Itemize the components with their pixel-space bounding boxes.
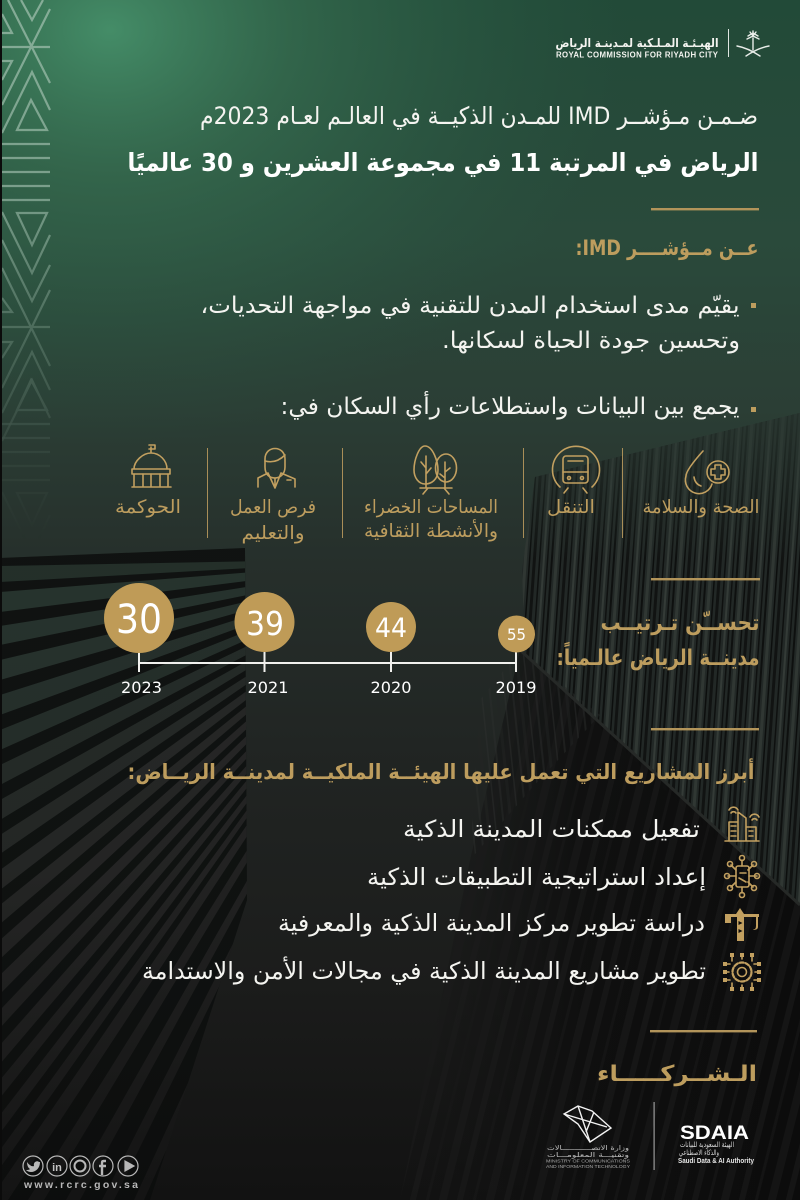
text block: index description: يقيّم مدى استخدام المدن للتقنية في مواجهة التحديات،	[200, 293, 740, 319]
project: security and sustainability	[142, 953, 761, 991]
text block: index description: يجمع بين البيانات واستطلاعات رأي السكان في:	[280, 391, 740, 420]
point: 2023 rank 30	[104, 583, 174, 697]
logo: ministry of communications: AND INFORMATION TECHNOLOGY	[546, 1164, 630, 1169]
title: الرياض في المرتبة 11 في مجموعة العشرين و 30 عالميًا	[127, 148, 758, 178]
domain: green spaces and culture	[364, 446, 498, 542]
timeline chart	[104, 583, 536, 697]
point: 2019 rank 55: 2019	[496, 678, 536, 697]
logo wordmark: الهيـئـة المـلـكية لمـدينـة الرياض	[556, 36, 718, 50]
domain: jobs and education: والتعليم	[242, 523, 304, 544]
domain: health and safety: الصحة والسلامة	[642, 497, 760, 518]
point: 2021 rank 39	[234, 592, 294, 697]
icon: domed building	[132, 445, 171, 487]
heading: partners: الـشــركـــــاء	[597, 1062, 757, 1087]
icon: two trees	[414, 446, 456, 494]
icon: palm and swords emblem	[737, 31, 769, 56]
point: 2020 rank 44	[366, 602, 416, 697]
point: 2019 rank 55: 55	[507, 625, 526, 644]
domain: mobility	[547, 446, 599, 518]
icon dots: circuit terminals	[723, 953, 761, 991]
logo wordmark	[556, 36, 719, 60]
domain: health and safety	[642, 451, 760, 518]
left ornament pattern	[2, 0, 51, 466]
icon: gear with circuits	[727, 957, 757, 987]
domain: jobs and education	[230, 448, 316, 544]
logo: SDAIA	[678, 1123, 754, 1165]
domain: mobility: التنقل	[547, 497, 595, 518]
social media and website	[23, 1156, 138, 1191]
domain: governance: الحوكمة	[115, 497, 181, 518]
domain dividers	[208, 448, 622, 538]
title: ضـمـن مـؤشــر IMD للمـدن الذكيــة في العالـم لعـام 2023م	[200, 102, 758, 130]
project: smart apps strategy: إعداد استراتيجية التطبيقات الذكية	[367, 863, 706, 892]
project: smart city centre development: دراسة تطوير مركز المدينة الذكية والمعرفية	[278, 909, 705, 937]
social media and website: www.rcrc.gov.sa	[23, 1179, 138, 1191]
logo: ministry of communications: وزارة الاتصــــــــــــالات	[547, 1144, 629, 1152]
left edge strip	[0, 0, 2, 1200]
icon: tower crane	[725, 908, 759, 941]
logo: SDAIA: والذكاء الاصطناعي	[679, 1148, 719, 1157]
heading: Riyadh ranking improvement: مدينــة الرياض عالـمياً:	[556, 641, 760, 671]
point: 2023 rank 30: 2023	[121, 678, 162, 697]
point: 2021 rank 39: 39	[246, 604, 284, 643]
panel: index domains	[115, 445, 760, 544]
text block: index description: وتحسين جودة الحياة لسكانها.	[442, 328, 740, 354]
icon: business person	[258, 448, 295, 488]
heading: key projects: أبرز المشاريع التي تعمل عليها الهيئــة الملكيــة لمدينــة الريــاض:	[128, 757, 754, 784]
point: 2019 rank 55	[496, 616, 536, 697]
logo wordmark: ROYAL COMMISSION FOR RIYADH CITY	[556, 50, 719, 60]
icon: smart buildings	[725, 807, 759, 841]
point: 2023 rank 30: 30	[116, 597, 162, 643]
domain: green spaces and culture: المساحات الخضراء	[364, 497, 498, 518]
photo: left tower	[2, 548, 247, 1135]
logo: SDAIA: الهيئة السعودية للبيانات	[680, 1140, 734, 1149]
domain: green spaces and culture: والأنشطة الثقافية	[364, 519, 498, 542]
icon: drop with cross	[685, 451, 729, 494]
social media and website: in	[52, 1162, 62, 1174]
icon: phone network	[724, 856, 760, 898]
title	[127, 102, 758, 178]
timeline axis	[139, 652, 516, 672]
project: smart city enablers: تفعيل ممكنات المدينة الذكية	[403, 815, 700, 843]
heading: Riyadh ranking improvement: تحســّن تـرتيــب	[600, 611, 760, 636]
bullet	[751, 303, 756, 308]
logo: ministry of communications	[546, 1106, 630, 1169]
project: smart apps strategy	[367, 856, 760, 898]
panel: partners	[546, 1102, 754, 1170]
icon: train in ring	[552, 446, 599, 493]
point: 2020 rank 44: 44	[375, 613, 407, 644]
point: 2020 rank 44: 2020	[370, 678, 412, 697]
domain: governance	[115, 445, 181, 518]
icon: ministry diamond	[564, 1106, 611, 1142]
project: smart city enablers	[403, 807, 759, 843]
logo: Royal Commission for Riyadh City	[556, 29, 769, 60]
logo: SDAIA: Saudi Data & AI Authority	[678, 1158, 754, 1165]
heading: Riyadh ranking improvement	[556, 611, 760, 671]
logo: ministry of communications: MINISTRY OF COMMUNICATIONS	[546, 1158, 630, 1164]
panel: projects list	[142, 807, 761, 991]
project: security and sustainability: تطوير مشاريع المدينة الذكية في مجالات الأمن والاستدامة	[142, 956, 706, 985]
heading: about the IMD index: عــن مــؤشــــر IMD:	[576, 236, 758, 260]
logo: ministry of communications: وتقنيـــة المعلومـــات	[547, 1151, 629, 1159]
icons: social media	[23, 1156, 138, 1176]
logo: SDAIA: SDAIA	[680, 1123, 749, 1144]
text block: index description	[200, 293, 756, 420]
photo: right tower	[522, 413, 800, 920]
photo: lower dark mass	[400, 650, 800, 1200]
domain: jobs and education: فرص العمل	[230, 497, 316, 518]
point: 2021 rank 39: 2021	[248, 678, 288, 697]
